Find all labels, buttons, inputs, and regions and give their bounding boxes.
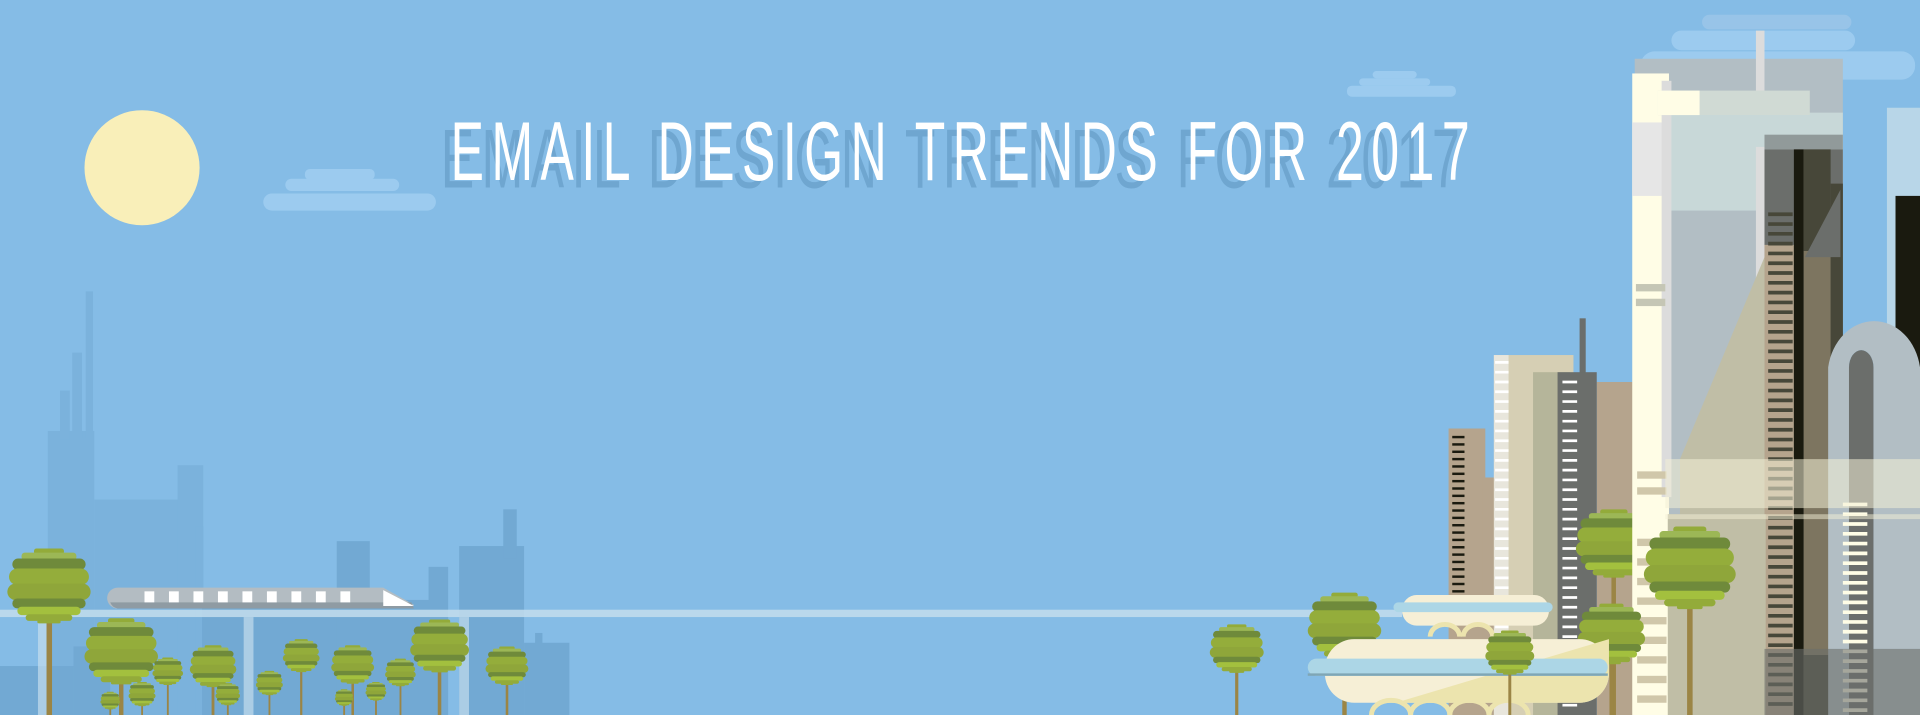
title: EMAIL DESIGN TRENDS FOR 2017 [441, 112, 1460, 206]
rail pillars [38, 617, 469, 715]
far right buildings and arch [1665, 108, 1920, 715]
tree: front small [1485, 631, 1534, 715]
cloud: top right [1641, 15, 1915, 80]
train [107, 588, 414, 608]
sun [84, 110, 200, 225]
main tower [1632, 31, 1843, 715]
trees: right group [1210, 526, 1736, 715]
cloud: middle [1347, 71, 1456, 97]
right city buildings [1449, 318, 1636, 715]
floating pods [1308, 595, 1609, 715]
title: EMAIL DESIGN TRENDS FOR 2017 [451, 105, 1470, 198]
left faded city silhouette [0, 291, 569, 715]
rail line [0, 610, 1402, 617]
cloud: left [263, 169, 436, 211]
trees: behind tower [1308, 509, 1652, 715]
trees: left group [7, 548, 528, 715]
